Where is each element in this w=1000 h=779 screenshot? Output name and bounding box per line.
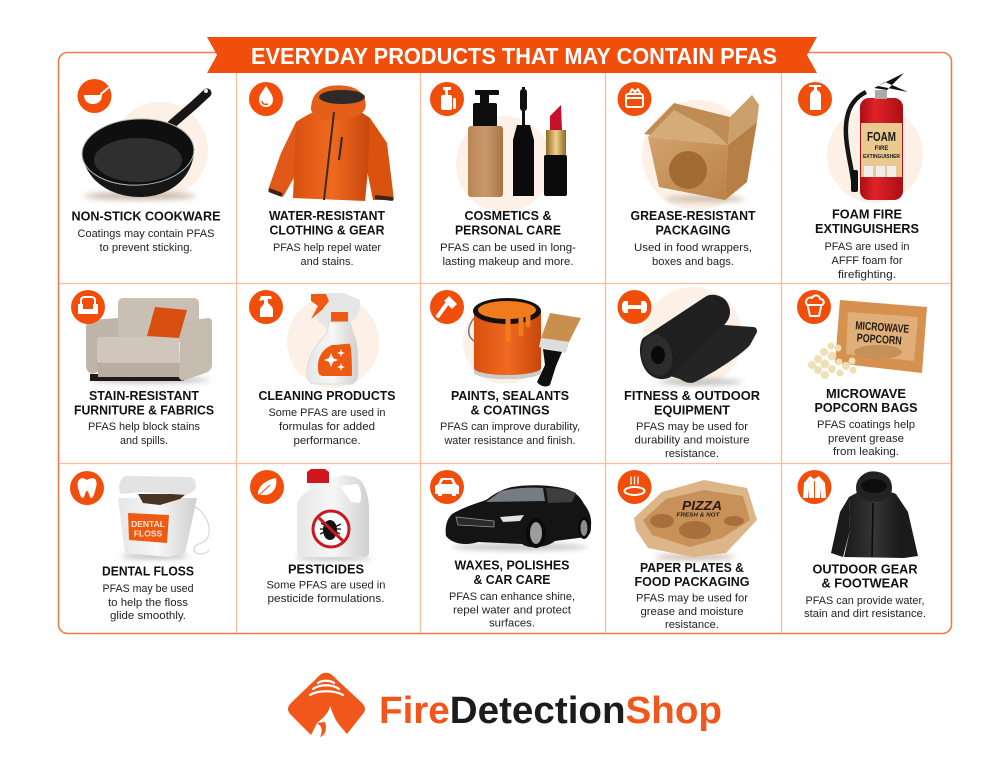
description: PFAS can provide water, bbox=[806, 595, 924, 607]
description: PFAS help block stains bbox=[88, 421, 200, 433]
image: black jacket bbox=[831, 471, 918, 558]
image: orange jacket bbox=[268, 85, 394, 201]
description: from leaking. bbox=[833, 446, 899, 458]
description: firefighting. bbox=[838, 269, 896, 281]
description bbox=[268, 407, 386, 447]
panel: non-stick cookware bbox=[72, 79, 221, 254]
image: fire extinguisher: FIRE bbox=[875, 146, 888, 152]
image: black car bbox=[446, 485, 591, 550]
description: PFAS help repel water bbox=[273, 242, 381, 254]
heading: CLEANING PRODUCTS bbox=[258, 388, 396, 403]
icon: paint brush bbox=[430, 290, 464, 324]
description bbox=[440, 242, 576, 268]
description: prevent grease bbox=[828, 433, 904, 445]
grid card bbox=[58, 52, 952, 634]
heading: COSMETICS & bbox=[464, 208, 552, 223]
description: AFFF foam for bbox=[832, 255, 903, 267]
heading bbox=[451, 388, 569, 418]
image: popcorn bag: MICROWAVE bbox=[855, 320, 910, 336]
heading bbox=[624, 388, 761, 418]
panel: dental floss bbox=[70, 471, 209, 622]
heading: POPCORN BAGS bbox=[814, 400, 918, 415]
icon: muffin bbox=[797, 290, 831, 324]
image: popcorn bag: POPCORN bbox=[856, 332, 902, 348]
icon: gift box bbox=[618, 82, 652, 116]
description: Coatings may contain PFAS bbox=[78, 228, 214, 240]
icon: tooth bbox=[70, 471, 104, 505]
image: fire extinguisher bbox=[827, 73, 923, 203]
heading: GREASE-RESISTANT bbox=[630, 208, 756, 223]
description bbox=[266, 580, 386, 605]
description bbox=[440, 421, 580, 447]
description bbox=[636, 592, 748, 631]
description: PFAS can improve durability, bbox=[440, 421, 580, 433]
icon: jacket bbox=[798, 470, 832, 504]
description bbox=[102, 583, 194, 622]
image: floss box bbox=[118, 476, 209, 559]
description: PFAS can be used in long- bbox=[440, 242, 576, 254]
description: PFAS may be used bbox=[102, 583, 194, 595]
panel: paints bbox=[430, 290, 581, 447]
heading bbox=[815, 206, 919, 236]
icon: water drop bbox=[249, 82, 283, 116]
description: PFAS can enhance shine, bbox=[449, 591, 575, 603]
heading: WATER-RESISTANT bbox=[269, 208, 385, 223]
heading bbox=[455, 208, 561, 238]
icon: pump bottle bbox=[430, 82, 464, 116]
image: pizza box: PIZZA bbox=[682, 499, 722, 513]
panel: water-resistant clothing bbox=[249, 82, 394, 268]
heading bbox=[634, 560, 750, 589]
heading: PESTICIDES bbox=[288, 562, 364, 576]
panel: cosmetics bbox=[430, 82, 576, 268]
heading: PAPER PLATES & bbox=[640, 560, 744, 575]
description bbox=[824, 241, 910, 281]
heading: MICROWAVE bbox=[826, 386, 906, 401]
heading bbox=[454, 558, 570, 587]
panel: outdoor gear bbox=[798, 470, 926, 620]
heading: EQUIPMENT bbox=[654, 402, 730, 418]
description: Some PFAS are used in bbox=[268, 407, 386, 419]
description bbox=[634, 421, 750, 460]
panel: stain-resistant furniture bbox=[71, 290, 214, 447]
heading: FOAM FIRE bbox=[832, 206, 902, 222]
image: popcorn bag bbox=[808, 300, 927, 379]
description bbox=[449, 591, 575, 630]
image: kraft box bbox=[642, 95, 759, 210]
description: water resistance and finish. bbox=[444, 435, 576, 447]
icon: logo mark bbox=[288, 673, 365, 737]
image: spray bottle bbox=[287, 293, 379, 388]
heading bbox=[74, 388, 214, 418]
heading: STAIN-RESISTANT bbox=[89, 388, 199, 403]
description bbox=[804, 595, 926, 620]
heading: & COATINGS bbox=[470, 402, 550, 418]
description: PFAS coatings help bbox=[817, 419, 915, 431]
description: formulas for added bbox=[279, 421, 375, 433]
heading: PERSONAL CARE bbox=[455, 222, 561, 238]
description: Used in food wrappers, bbox=[634, 242, 752, 254]
panel: cleaning products bbox=[249, 290, 396, 447]
description: stain and dirt resistance. bbox=[804, 608, 926, 620]
icon: armchair bbox=[71, 290, 105, 324]
heading: DENTAL FLOSS bbox=[102, 564, 194, 578]
description bbox=[634, 242, 752, 268]
description: PFAS are used in bbox=[824, 241, 910, 253]
panel: microwave popcorn bbox=[797, 290, 927, 458]
image: armchair bbox=[86, 298, 212, 383]
icon: dumbbell bbox=[618, 290, 652, 324]
icon: hot plate bbox=[618, 470, 652, 504]
panel: paper plates bbox=[618, 470, 757, 631]
heading: OUTDOOR GEAR bbox=[812, 562, 918, 576]
description: boxes and bags. bbox=[652, 256, 734, 268]
heading: NON-STICK COOKWARE bbox=[72, 208, 221, 224]
heading bbox=[814, 386, 918, 415]
image: floss box: FLOSS bbox=[134, 528, 162, 538]
wordmark: FireDetectionShop bbox=[379, 690, 722, 732]
image: pesticide jug bbox=[295, 469, 371, 560]
icon: spray bottle bbox=[249, 290, 283, 324]
heading bbox=[812, 562, 918, 590]
image: frying pan bbox=[80, 89, 208, 200]
heading: & FOOTWEAR bbox=[822, 576, 909, 590]
image: paint can and brush bbox=[463, 298, 581, 386]
heading: EXTINGUISHERS bbox=[815, 221, 919, 236]
description: and spills. bbox=[120, 435, 168, 447]
icon: extinguisher bbox=[798, 82, 832, 116]
panel: pesticides bbox=[250, 469, 386, 605]
heading: CLOTHING & GEAR bbox=[270, 222, 385, 238]
description: lasting makeup and more. bbox=[442, 256, 574, 268]
description: and stains. bbox=[300, 256, 354, 268]
image: pizza box: FRESH & NOT bbox=[676, 512, 720, 518]
heading: WAXES, POLISHES bbox=[454, 558, 570, 572]
description: PFAS may be used for bbox=[636, 421, 748, 433]
logo bbox=[288, 673, 722, 737]
icon: pan bbox=[78, 79, 112, 113]
panel: fitness equipment bbox=[618, 287, 761, 460]
title banner bbox=[207, 37, 817, 73]
description: resistance. bbox=[665, 619, 719, 631]
description: glide smoothly. bbox=[110, 610, 186, 622]
panel: foam fire extinguishers bbox=[798, 73, 923, 281]
description bbox=[817, 419, 915, 458]
description: durability and moisture bbox=[634, 434, 750, 446]
heading bbox=[269, 208, 385, 238]
image: fire extinguisher: EXTINGUISHER bbox=[863, 154, 900, 160]
description: to prevent sticking. bbox=[100, 242, 192, 254]
title banner: EVERYDAY PRODUCTS THAT MAY CONTAIN PFAS bbox=[251, 43, 777, 69]
heading bbox=[630, 208, 756, 238]
heading: FURNITURE & FABRICS bbox=[74, 402, 214, 418]
image: fire extinguisher: FOAM bbox=[867, 129, 896, 144]
heading: FOOD PACKAGING bbox=[634, 574, 750, 589]
description bbox=[273, 242, 381, 268]
panel: grease-resistant packaging bbox=[618, 82, 759, 268]
description: resistance. bbox=[665, 448, 719, 460]
panel: waxes and car care bbox=[430, 470, 591, 630]
heading: PAINTS, SEALANTS bbox=[451, 388, 569, 403]
description: Some PFAS are used in bbox=[266, 580, 386, 592]
image: pizza box bbox=[634, 480, 757, 560]
description: PFAS may be used for bbox=[636, 592, 748, 604]
image: yoga mat bbox=[637, 287, 757, 387]
image: makeup bbox=[456, 87, 567, 212]
heading: & CAR CARE bbox=[474, 572, 551, 587]
description: to help the floss bbox=[108, 597, 189, 609]
description bbox=[88, 421, 200, 447]
description: performance. bbox=[294, 435, 360, 447]
description: repel water and protect bbox=[453, 604, 571, 616]
description bbox=[78, 228, 214, 254]
description: grease and moisture bbox=[640, 606, 744, 618]
description: surfaces. bbox=[489, 618, 535, 630]
heading: FITNESS & OUTDOOR bbox=[624, 388, 761, 403]
image: floss box: DENTAL bbox=[131, 519, 165, 529]
icon: leaf bbox=[250, 470, 284, 504]
heading: PACKAGING bbox=[656, 222, 730, 238]
icon: car bbox=[430, 470, 464, 504]
description: pesticide formulations. bbox=[268, 593, 384, 605]
